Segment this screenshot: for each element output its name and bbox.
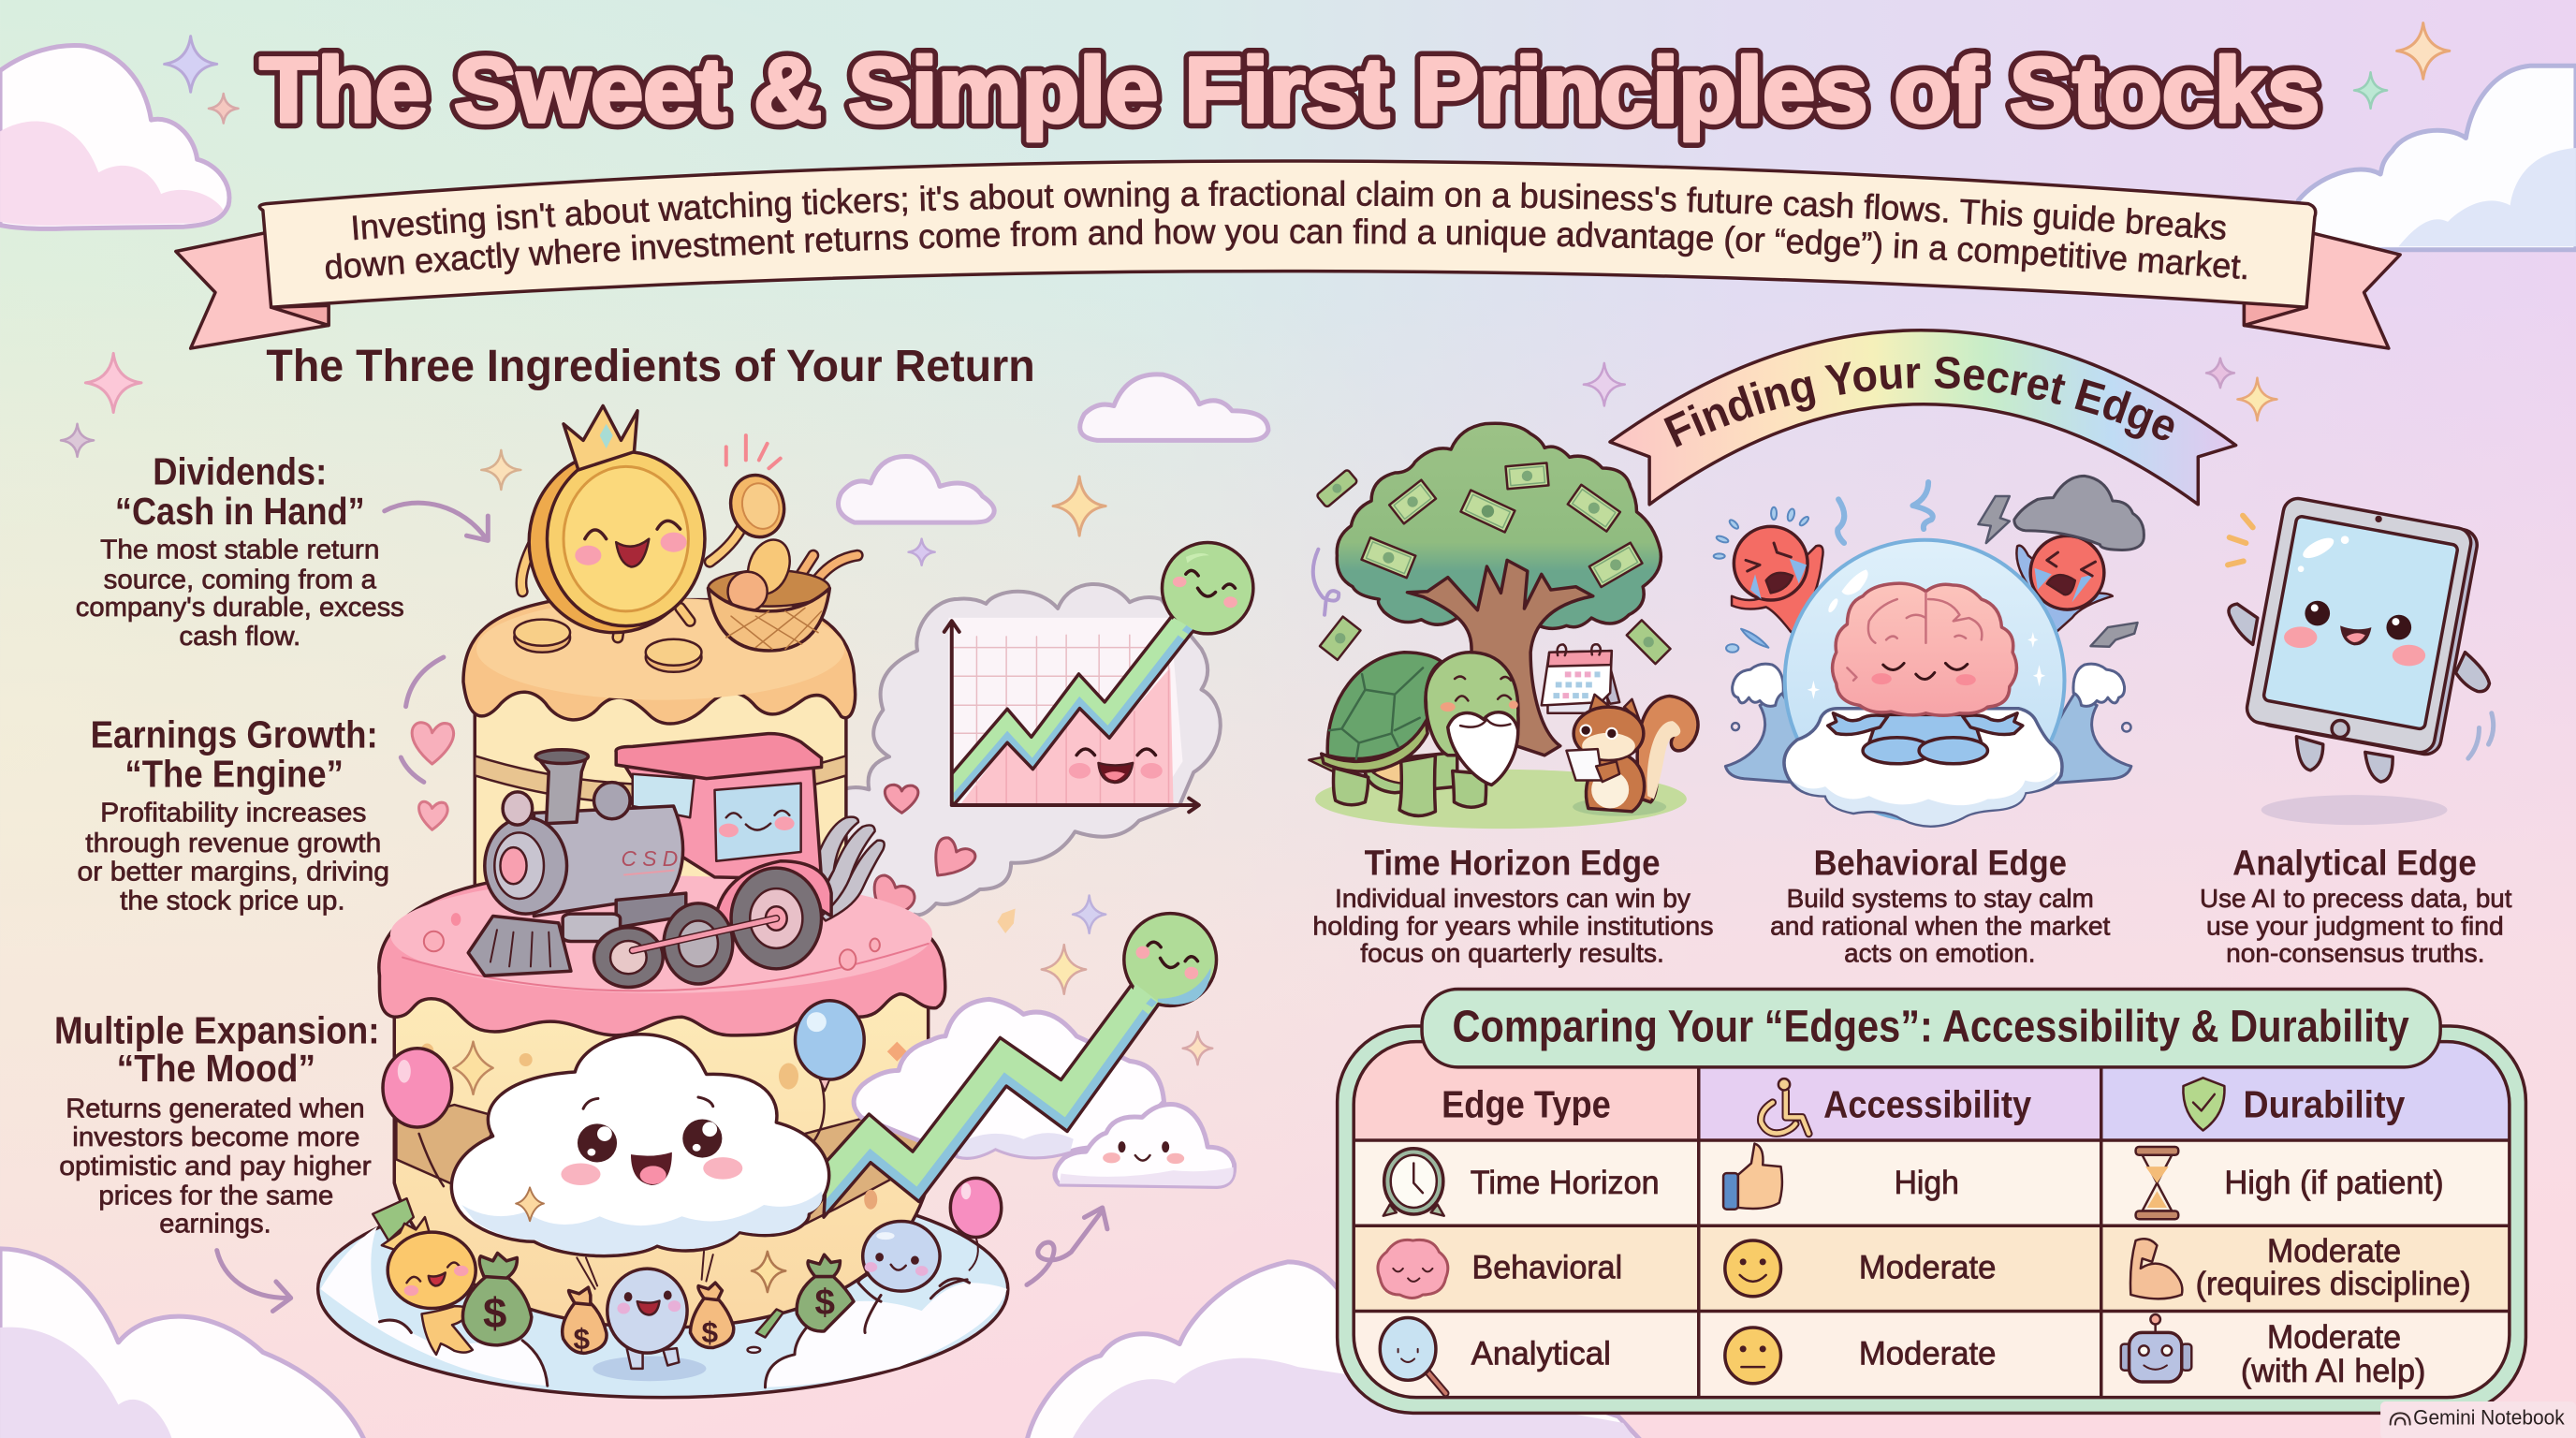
subtitle ribbon: down exactly where investment returns come from and how you can find a unique advantage (or “edge”) in a competitive market.	[326, 218, 2247, 279]
icon: flexed arm	[2130, 1239, 2182, 1299]
edge text: time horizon: Time Horizon Edge	[1365, 844, 1661, 883]
text: earnings growth: through revenue growth	[85, 829, 381, 858]
text: dividends: source, coming from a	[104, 565, 377, 594]
sparkles	[61, 23, 2450, 1064]
exhaust pipes	[813, 817, 885, 920]
cloud: bottom centre	[1027, 1262, 1641, 1438]
small coins on cake	[514, 620, 701, 672]
crying red figure left	[1732, 526, 1823, 632]
balloons	[383, 1001, 1002, 1270]
row 1 text: High	[1895, 1165, 1959, 1201]
edge text: time horizon	[1312, 844, 1714, 968]
text: dividends: cash flow.	[179, 622, 300, 652]
cake: plate	[318, 1181, 1008, 1398]
cloud: bottom left corner	[0, 1249, 365, 1438]
lightning bolts	[1978, 496, 2138, 647]
row 3 text: Moderate	[1859, 1336, 1996, 1372]
table header text	[1442, 1082, 2406, 1125]
cloud: small decorative lower	[838, 457, 994, 522]
dollar signs: $	[574, 1322, 591, 1356]
dollar signs: $	[701, 1315, 718, 1349]
cloud: small decorative upper	[1080, 374, 1268, 440]
text: multiple expansion: Returns generated when	[66, 1093, 365, 1123]
foliage	[1337, 423, 1661, 628]
text: dividends: company's durable, excess	[76, 593, 404, 623]
hearts near earnings text	[412, 723, 454, 829]
cloud: top right corner	[2291, 66, 2576, 250]
boiler	[485, 806, 683, 917]
blue tears and squiggles	[1714, 482, 2131, 731]
tablet face	[2284, 601, 2425, 666]
rising line with smiling head	[824, 914, 1217, 1217]
cowcatcher and frame	[468, 917, 571, 976]
row 2 text: Moderate	[2267, 1233, 2401, 1269]
bubble highlights	[1808, 569, 2045, 699]
text: multiple expansion: optimistic and pay higher	[59, 1152, 372, 1181]
fender	[714, 861, 831, 939]
calendar	[1542, 644, 1619, 713]
row 1 text: High (if patient)	[2224, 1165, 2444, 1201]
money bag right	[797, 1255, 854, 1331]
edge text: time horizon: Individual investors can win by	[1335, 884, 1690, 913]
squirrel	[1566, 695, 1698, 812]
basket	[708, 534, 857, 651]
tablet limbs	[2229, 604, 2489, 782]
meditating body	[1828, 713, 2023, 764]
text: multiple expansion: investors become more	[72, 1123, 359, 1152]
watermark: gemini notebook: Gemini Notebook	[2413, 1406, 2565, 1430]
icon: accessibility	[1761, 1078, 1808, 1134]
text: multiple expansion: “The Mood”	[117, 1047, 315, 1090]
edge text: analytical: Analytical Edge	[2232, 844, 2477, 883]
icon: robot	[2121, 1314, 2191, 1382]
row 3 text: Moderate	[2267, 1319, 2401, 1356]
money bag small left	[563, 1287, 607, 1353]
character: dividend coin with crown and basket	[514, 405, 857, 672]
arrows: left column	[217, 503, 1107, 1312]
money bag large	[462, 1253, 532, 1345]
icon: neutral face	[1725, 1328, 1781, 1384]
edge text: behavioral: Build systems to stay calm	[1787, 884, 2094, 913]
illustration: money tree, turtle and squirrel	[1309, 423, 1698, 829]
illustration: happy tablet	[2228, 496, 2494, 825]
storm cloud	[2014, 476, 2144, 550]
trunk	[1407, 560, 1593, 756]
text: earnings growth: the stock price up.	[120, 886, 345, 916]
row 3 text: (with AI help)	[2241, 1353, 2425, 1389]
blue buddy	[607, 1269, 687, 1369]
bubble	[1785, 540, 2064, 821]
icon: mini brain	[1378, 1240, 1448, 1298]
heading: three ingredients: The Three Ingredients of Your Return	[266, 341, 1035, 391]
text: dividends: “Cash in Hand”	[115, 490, 365, 533]
text: dividends: The most stable return	[100, 536, 379, 565]
cloud behind rising line	[854, 999, 1164, 1157]
illustration: brain in bubble amid stormy emotions	[1714, 476, 2144, 826]
row 2 text: Behavioral	[1472, 1249, 1622, 1285]
subtitle text: Investing isn't about watching tickers; it's about owning a fractional claim on a business's future cash flows. This guide breaks	[352, 180, 2226, 240]
table cell backgrounds	[1354, 1042, 2510, 1399]
text: earnings growth: “The Engine”	[124, 753, 344, 796]
cake: middle tier	[475, 674, 846, 945]
ribbon: finding your secret edge	[1608, 329, 2237, 506]
money bag small right	[690, 1283, 734, 1348]
brain	[1833, 583, 2016, 715]
plate clouds and characters	[320, 1198, 1007, 1387]
ribbon text: Finding Your Secret Edge	[1663, 356, 2174, 448]
chart grid	[952, 635, 1168, 803]
lilac buddy	[858, 1221, 967, 1333]
crying figure right	[2016, 536, 2113, 632]
sparkle on cake	[453, 1042, 493, 1094]
row 1 text: Time Horizon	[1471, 1165, 1660, 1201]
icon: magnifier	[1380, 1318, 1445, 1393]
edge text: analytical: use your judgment to find	[2206, 912, 2504, 941]
table header text: Edge Type	[1442, 1082, 1611, 1125]
right plate cloud	[765, 1283, 1007, 1387]
panel: comparison table	[1338, 990, 2525, 1413]
edge text: behavioral: Behavioral Edge	[1814, 844, 2067, 883]
sparkle dashes	[726, 435, 781, 468]
hearts	[874, 785, 975, 916]
subtitle ribbon	[174, 159, 2402, 350]
gold sparkle	[752, 1252, 785, 1292]
icon: hourglass	[2136, 1147, 2178, 1219]
text: earnings growth: Profitability increases	[100, 799, 366, 829]
edge text: behavioral: acts on emotion.	[1844, 939, 2036, 968]
cloud: top left corner	[0, 45, 229, 228]
text: multiple expansion: earnings.	[159, 1209, 271, 1239]
screen highlights	[2298, 534, 2349, 572]
text: multiple expansion: prices for the same	[98, 1181, 333, 1211]
cloud with face small	[1055, 1105, 1235, 1186]
yellow coin buddy	[373, 1198, 476, 1355]
icon: thumbs up	[1723, 1143, 1782, 1210]
dollar signs	[483, 1283, 835, 1356]
character: happy mood cloud	[451, 1034, 829, 1256]
table header text: Accessibility	[1823, 1082, 2032, 1125]
icon: clock	[1383, 1149, 1444, 1216]
text: multiple expansion: Multiple Expansion:	[54, 1008, 379, 1051]
left plate cloud	[320, 1226, 548, 1386]
cab	[616, 734, 822, 879]
cake: pink icing tier	[379, 875, 945, 1035]
table header text: Durability	[2244, 1082, 2406, 1125]
train engine	[468, 734, 885, 987]
edge text: analytical	[2200, 844, 2512, 968]
edge text: behavioral: and rational when the market	[1770, 912, 2111, 941]
cake: caramel icing tier	[463, 598, 856, 724]
text: earnings growth: Earnings Growth:	[91, 713, 378, 756]
cloud seat	[1784, 709, 2062, 826]
row 3 text	[1471, 1319, 2425, 1389]
smoke cloud with growth chart	[830, 543, 1253, 930]
title: The Sweet & Simple First Principles of Stocks	[259, 38, 2320, 141]
edge text: time horizon: focus on quarterly results.	[1360, 939, 1664, 968]
row 1 text	[1471, 1165, 2444, 1201]
icon: smiling face	[1725, 1240, 1781, 1297]
dollar signs: $	[815, 1283, 835, 1323]
text: dividends: Dividends:	[153, 450, 327, 493]
waves	[1725, 664, 2131, 784]
edge text: analytical: Use AI to precess data, but	[2200, 884, 2512, 913]
edge text: behavioral	[1770, 844, 2111, 968]
chimney and dome	[538, 755, 587, 824]
edge text: time horizon: holding for years while institutions	[1312, 912, 1714, 941]
chart axes	[944, 621, 1199, 812]
motion marks	[2228, 516, 2494, 758]
text: earnings growth: or better margins, driving	[78, 858, 389, 888]
icon: shield	[2183, 1078, 2224, 1130]
row 2 text: Moderate	[1859, 1249, 1996, 1285]
cake: bottom tier	[394, 986, 929, 1328]
edge text: analytical: non-consensus truths.	[2226, 939, 2485, 968]
chart area	[961, 668, 1173, 803]
crown	[564, 405, 637, 470]
turtle	[1309, 653, 1518, 815]
chart line	[952, 616, 1193, 803]
text: multiple expansion	[54, 1008, 379, 1239]
watermark: gemini notebook	[2380, 1401, 2576, 1438]
bills on tree	[1316, 462, 1671, 664]
text: earnings growth	[78, 713, 389, 916]
wheels	[594, 868, 822, 987]
row 3 text: Analytical	[1471, 1336, 1611, 1372]
label on boiler: C S D	[621, 846, 678, 871]
row 2 text	[1472, 1233, 2471, 1302]
ropes	[577, 1252, 713, 1289]
table title pill: Comparing Your “Edges”: Accessibility & Durability	[1453, 1002, 2409, 1052]
table title pill	[1422, 990, 2440, 1067]
row 2 text: (requires discipline)	[2196, 1266, 2471, 1302]
dollar signs: $	[483, 1289, 506, 1337]
title: The Sweet & Simple First Principles of Stocks	[259, 38, 2320, 141]
text: dividends	[76, 450, 404, 652]
